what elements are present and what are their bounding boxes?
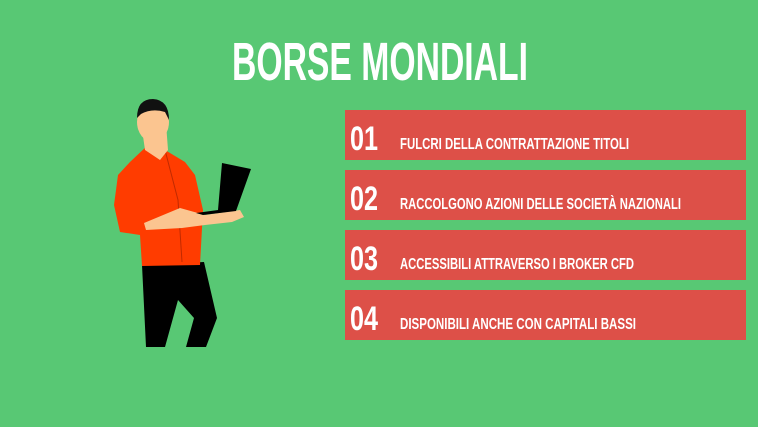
item 04 xyxy=(345,290,746,340)
item 04: DISPONIBILI ANCHE CON CAPITALI BASSI xyxy=(400,316,636,333)
item 03: 03 xyxy=(350,240,378,278)
item 01: 01 xyxy=(350,120,378,158)
illustration: man with laptop xyxy=(114,99,251,347)
item 02 xyxy=(345,170,746,220)
item 01: FULCRI DELLA CONTRATTAZIONE TITOLI xyxy=(400,136,629,153)
item 03: ACCESSIBILI ATTRAVERSO I BROKER CFD xyxy=(400,256,634,273)
item 03 xyxy=(345,230,746,280)
item 01 xyxy=(345,110,746,160)
item 04: 04 xyxy=(350,300,378,338)
title: BORSE MONDIALI xyxy=(232,32,528,92)
item 02: 02 xyxy=(350,180,378,218)
